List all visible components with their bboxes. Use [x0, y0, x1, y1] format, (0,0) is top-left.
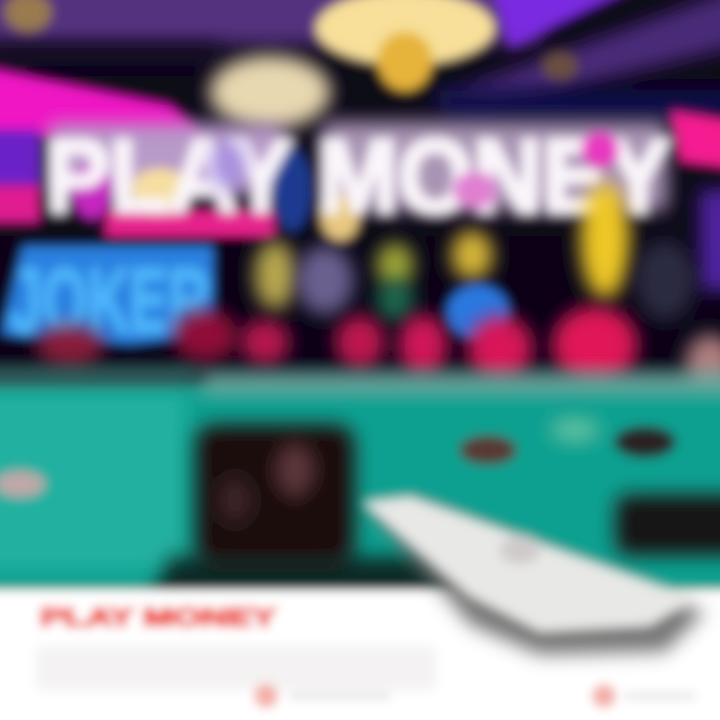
sign: blue word — [0, 245, 214, 352]
neon magenta band — [0, 62, 720, 246]
white footer panel — [0, 590, 720, 720]
teal casino table — [0, 368, 720, 600]
coloured lights and seats — [36, 182, 720, 395]
footer heading: PLAY MONEY — [40, 602, 276, 632]
chip stacks — [195, 418, 720, 564]
sign: blue word: JOKER — [10, 250, 210, 352]
footer icons — [254, 684, 695, 708]
lower wall colours — [0, 190, 720, 386]
chandeliers — [4, 0, 578, 128]
sign: PLAY MONEY: PLAY MONEY — [46, 119, 670, 235]
background: casino room — [0, 0, 720, 440]
smartphone — [362, 496, 705, 655]
